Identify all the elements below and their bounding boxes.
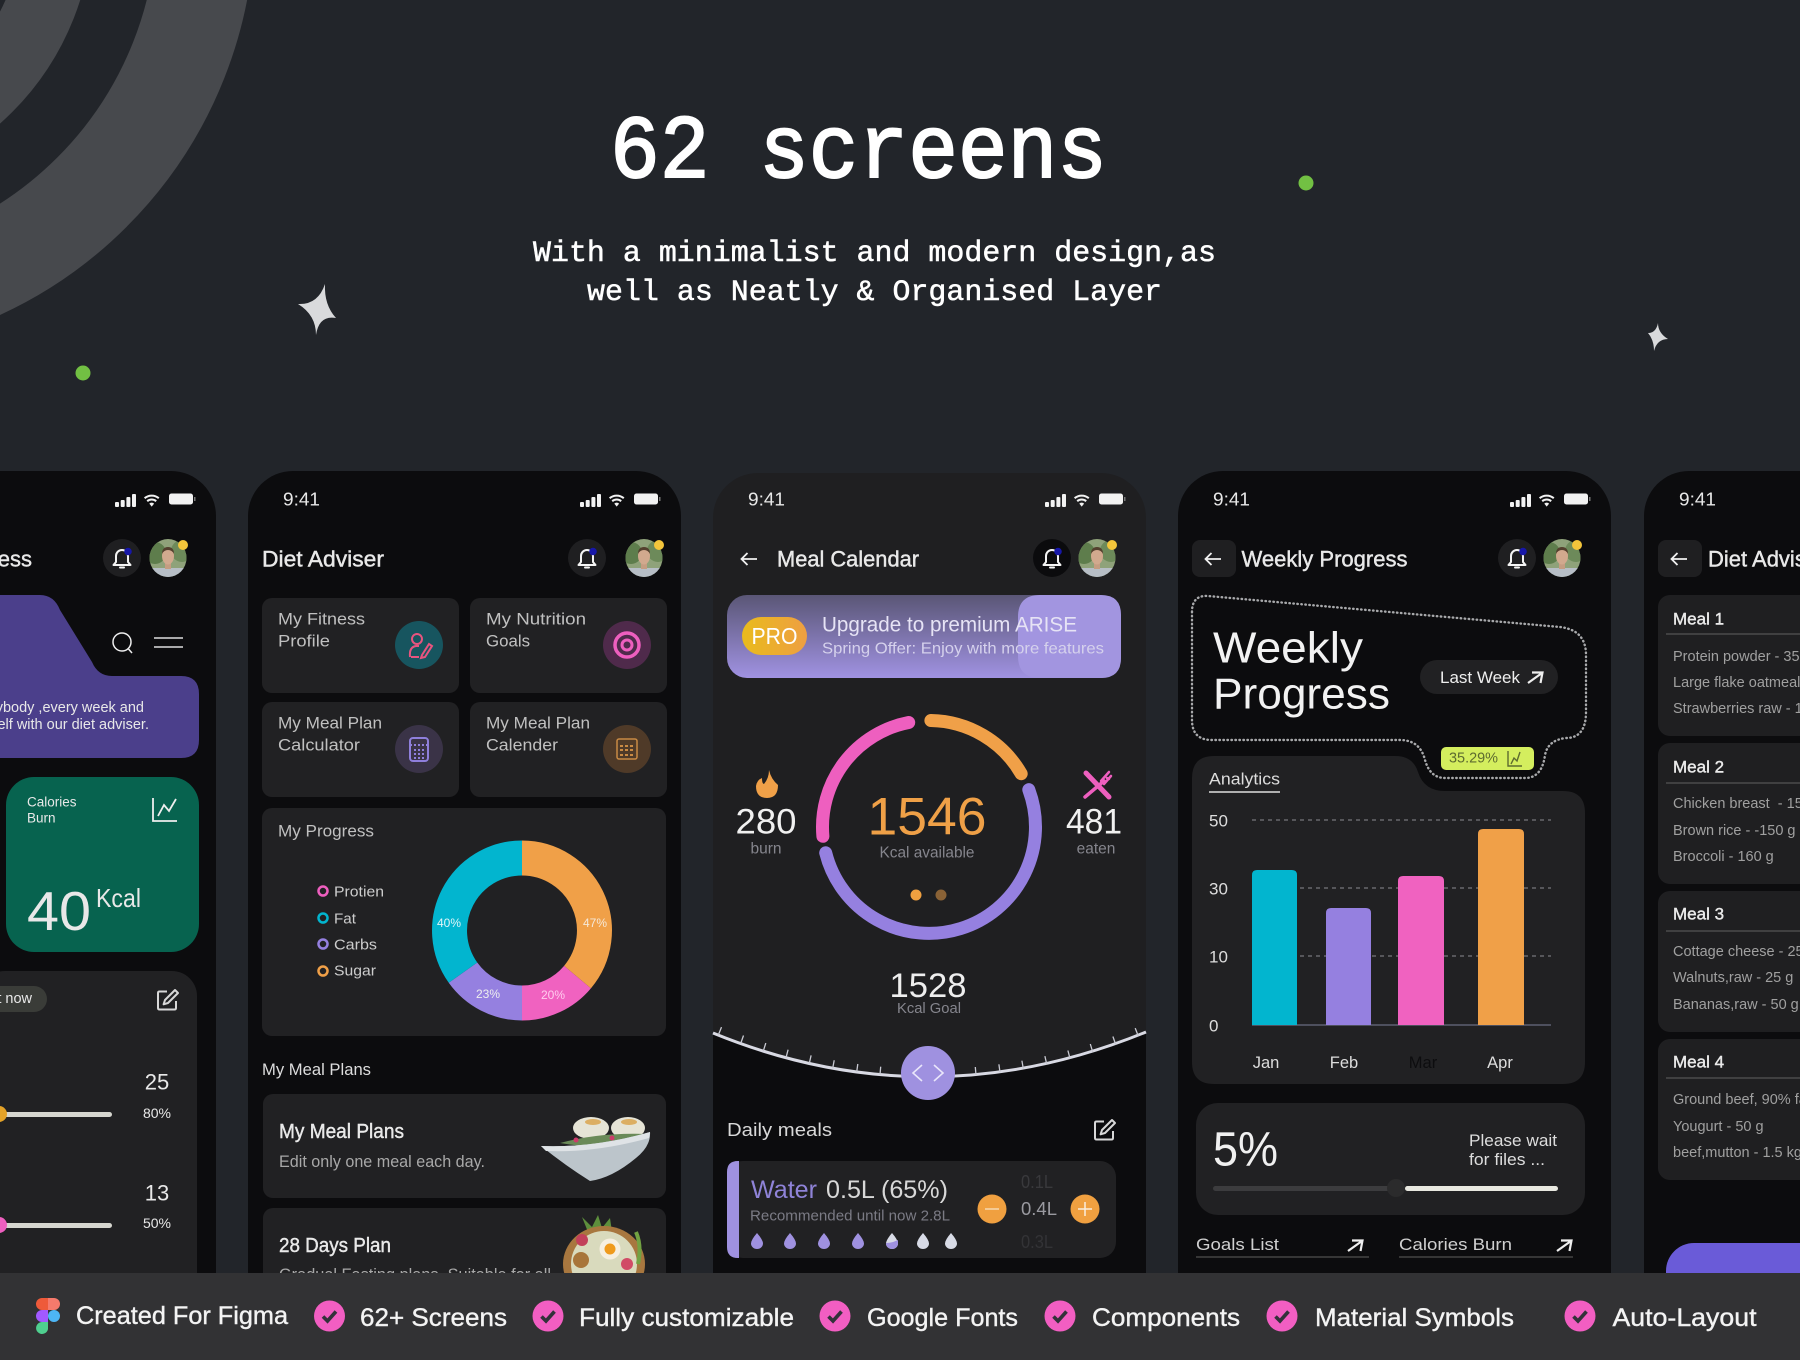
legend — [318, 884, 384, 980]
card: fitness profile: Profile — [278, 632, 330, 650]
phone lower dark area — [713, 1032, 1146, 1330]
calories burn card: Kcal — [96, 883, 141, 913]
PRO badge — [742, 617, 807, 655]
card: my meal plans — [263, 1094, 666, 1198]
kcal ring chart: 1546 — [868, 788, 986, 846]
salad image — [563, 1215, 645, 1302]
calories burn card — [6, 777, 199, 952]
card: meal 4: Meal 4 — [1673, 1052, 1724, 1072]
phone 5: diet adviser meals (cropped right) — [1644, 471, 1800, 1331]
panel: analytics — [1192, 756, 1585, 1084]
bottom feature bar — [0, 1273, 1800, 1360]
subtitle: well as Neatly & Organised Layer — [587, 276, 1162, 310]
card: fitness profile: My Fitness — [278, 610, 365, 628]
upgrade banner: Upgrade to premium ARISE — [822, 614, 1077, 636]
bell button — [103, 539, 141, 577]
card: meal plan calculator: Calculator — [278, 736, 360, 754]
bell button — [1498, 539, 1536, 577]
card: meal 1: Meal 1 — [1673, 610, 1724, 628]
feature: fully customizable — [532, 1300, 794, 1332]
card: meal 4: beef,mutton - 1.5 kg — [1673, 1145, 1800, 1161]
phone 2: diet adviser — [248, 471, 681, 1331]
feature: auto-layout: Auto-Layout — [1612, 1304, 1757, 1332]
feature: google fonts — [820, 1300, 1018, 1332]
status bar icons — [115, 494, 196, 507]
search icon — [113, 633, 132, 653]
phone 3: meal calendar — [713, 473, 1146, 1333]
card: meal 3: Walnuts,raw - 25 g — [1673, 970, 1793, 986]
card: meal plan calculator — [262, 702, 459, 797]
screen title: Weekly Progress — [1242, 546, 1408, 572]
purple banner — [0, 595, 199, 758]
kcal goal: 1528 — [890, 967, 966, 1005]
hero heading: Progress — [1213, 670, 1390, 718]
avatar — [1538, 539, 1587, 577]
card: meal 3 — [1658, 891, 1800, 1032]
upgrade banner: Spring Offer: Enjoy with more features — [822, 640, 1104, 658]
eaten stat — [1066, 772, 1122, 858]
status bar icons — [1045, 494, 1126, 507]
green dot right — [1298, 176, 1314, 190]
feature: components — [1044, 1300, 1240, 1332]
bar chart: Apr — [1487, 1054, 1513, 1072]
back button — [1192, 540, 1236, 577]
sparkle star left — [298, 284, 336, 335]
legend: Fat — [334, 910, 357, 928]
bar chart: 10 — [1209, 948, 1228, 966]
card: nutrition goals: Goals — [486, 632, 530, 650]
legend: Carbs — [334, 936, 377, 954]
link: calories burn — [1399, 1236, 1573, 1257]
card: meal 2: Brown rice - -150 g — [1673, 823, 1796, 839]
stepper: 0.4L — [1021, 1199, 1057, 1219]
card: meal 2: Broccoli - 160 g — [1673, 849, 1774, 865]
menu icon — [154, 638, 183, 647]
hero heading — [1213, 624, 1390, 718]
eaten stat: 481 — [1066, 802, 1122, 842]
donut chart — [437, 858, 607, 1003]
title: 62 screens — [610, 103, 1107, 205]
calories burn card: Burn — [27, 810, 56, 826]
card: meal 1 — [1658, 595, 1800, 736]
dotted outline hero — [1192, 596, 1586, 778]
heading: daily meals: Daily meals — [727, 1120, 832, 1140]
kcal ring chart: Kcal available — [880, 844, 974, 862]
phone 4: weekly progress — [1178, 471, 1611, 1331]
bar chart: Jan — [1253, 1054, 1279, 1072]
status bar icons — [1510, 494, 1590, 507]
sliders panel: 80% — [143, 1105, 171, 1121]
screen title: Meal Calendar — [777, 546, 919, 572]
card: meal plan calendar: Calender — [486, 736, 558, 754]
stepper — [978, 1172, 1100, 1252]
icon: figma logo — [36, 1298, 60, 1334]
icon: calendar — [603, 725, 651, 773]
icon: edit — [158, 990, 178, 1010]
card: nutrition goals — [470, 598, 667, 693]
link: calories burn: Calories Burn — [1399, 1236, 1512, 1254]
card: nutrition goals: My Nutrition — [486, 610, 586, 628]
status time: 9:41 — [283, 488, 320, 510]
panel: file progress: 5% — [1213, 1124, 1278, 1176]
bar chart: Mar — [1409, 1054, 1438, 1072]
feature: google fonts: Google Fonts — [867, 1304, 1018, 1332]
card: 28 days plan: 28 Days Plan — [279, 1235, 391, 1257]
donut chart: 23% — [476, 987, 500, 1001]
stepper: 0.3L — [1021, 1232, 1053, 1252]
slider handle — [901, 1046, 955, 1100]
donut chart: 40% — [437, 916, 461, 930]
icon: chart — [153, 798, 177, 821]
percent tag — [1441, 747, 1534, 770]
card: meal plan calendar — [470, 702, 667, 797]
PRO badge: PRO — [752, 623, 798, 649]
burn stat: 280 — [736, 802, 796, 842]
back arrow — [742, 553, 757, 565]
donut chart: 20% — [541, 988, 565, 1002]
water card: Water — [751, 1176, 817, 1204]
kcal goal: Kcal Goal — [897, 1001, 961, 1017]
sliders panel — [0, 971, 197, 1311]
icon: target — [603, 621, 651, 669]
sparkle star right — [1648, 323, 1668, 351]
legend: Sugar — [334, 962, 376, 980]
percent tag: 35.29% — [1449, 750, 1498, 766]
legend: Protien — [334, 884, 384, 900]
burn stat: burn — [750, 840, 782, 858]
bar chart: 0 — [1209, 1016, 1218, 1036]
status bar icons — [580, 494, 660, 507]
feature: 62+ screens — [314, 1300, 507, 1332]
bar chart: 50 — [1209, 812, 1228, 830]
eaten stat: eaten — [1077, 840, 1115, 858]
card: fitness profile — [262, 598, 459, 693]
water card: Recommended until now 2.8L — [750, 1208, 950, 1224]
calorie slider curve — [713, 1027, 1146, 1100]
icon: edit — [1095, 1120, 1115, 1140]
calories burn card: 40 — [27, 880, 91, 942]
green dot left — [76, 366, 90, 380]
status time: 9:41 — [1679, 488, 1716, 510]
sliders panel: 50% — [143, 1215, 171, 1231]
heading: my meal plans: My Meal Plans — [262, 1061, 371, 1079]
status time: 9:41 — [748, 488, 785, 510]
card: meal 2: Meal 2 — [1673, 758, 1724, 776]
card: meal 3: Bananas,raw - 50 g — [1673, 997, 1799, 1013]
water card — [727, 1161, 1116, 1258]
phone 1: progress screen (cropped left) — [0, 471, 216, 1331]
icon: flame — [756, 770, 778, 798]
feature: 62+ screens: 62+ Screens — [360, 1304, 507, 1332]
sliders panel: 13 — [145, 1180, 169, 1206]
icon: fork and knife — [1085, 772, 1111, 797]
bar chart — [1209, 812, 1551, 1072]
water card: 0.5L (65%) — [826, 1176, 948, 1204]
card: meal 4: Yougurt - 50 g — [1673, 1119, 1764, 1135]
feature: auto-layout — [1564, 1300, 1757, 1332]
link: goals list: Goals List — [1196, 1236, 1279, 1254]
feature: material symbols: Material Symbols — [1315, 1304, 1514, 1332]
status time: 9:41 — [1213, 488, 1250, 510]
bowl image — [541, 1117, 650, 1181]
sliders panel: 25 — [145, 1070, 169, 1094]
screen title: Diet Adviser — [262, 546, 384, 572]
subtitle — [533, 237, 1216, 310]
avatar — [144, 539, 193, 577]
feature: components: Components — [1092, 1304, 1240, 1332]
panel: file progress — [1196, 1103, 1585, 1215]
card: meal plan calendar: My Meal Plan — [486, 714, 590, 732]
card: meal 4 — [1658, 1039, 1800, 1180]
card: my meal plans: Edit only one meal each day. — [279, 1153, 485, 1171]
bell button — [1033, 539, 1071, 577]
card: my meal plans: My Meal Plans — [279, 1121, 404, 1143]
stepper: 0.1L — [1021, 1172, 1053, 1192]
feature: material symbols — [1266, 1300, 1514, 1332]
card: meal 2 — [1658, 743, 1800, 884]
panel: my progress — [262, 808, 666, 1036]
water drops — [751, 1233, 957, 1249]
burn stat — [736, 770, 796, 858]
bell button — [568, 539, 606, 577]
donut chart: 47% — [583, 916, 607, 930]
card: 28 days plan — [263, 1208, 666, 1318]
icon: person pencil — [395, 621, 443, 669]
calories burn card: Calories — [27, 794, 77, 810]
card: meal plan calculator: My Meal Plan — [278, 714, 382, 732]
phone upper body — [713, 473, 1146, 1333]
avatar — [1073, 539, 1122, 577]
hero heading: Weekly — [1213, 624, 1363, 672]
label: created for figma: Created For Figma — [76, 1302, 288, 1330]
bar chart: 30 — [1209, 880, 1228, 898]
purple button — [1666, 1243, 1800, 1303]
subtitle: With a minimalist and modern design,as — [533, 237, 1216, 271]
last week pill: Last Week — [1440, 668, 1520, 687]
bar chart: Feb — [1330, 1054, 1358, 1072]
last week pill — [1420, 660, 1558, 694]
upgrade banner — [727, 595, 1121, 678]
panel: analytics: Analytics — [1209, 770, 1280, 788]
card: meal 3: Meal 3 — [1673, 904, 1724, 924]
panel: my progress: My Progress — [278, 822, 374, 840]
card: 28 days plan: Gradual Fasting plans. Suitable for all — [279, 1266, 551, 1284]
panel: file progress: for files ... — [1469, 1151, 1545, 1169]
kcal ring chart — [822, 720, 1035, 933]
back button — [1658, 540, 1702, 577]
feature: fully customizable: Fully customizable — [579, 1304, 794, 1332]
icon: calculator — [395, 725, 443, 773]
avatar — [620, 539, 669, 577]
panel: file progress: Please wait — [1469, 1132, 1557, 1150]
decorative concentric rings — [0, 0, 206, 306]
link: goals list — [1196, 1236, 1369, 1257]
